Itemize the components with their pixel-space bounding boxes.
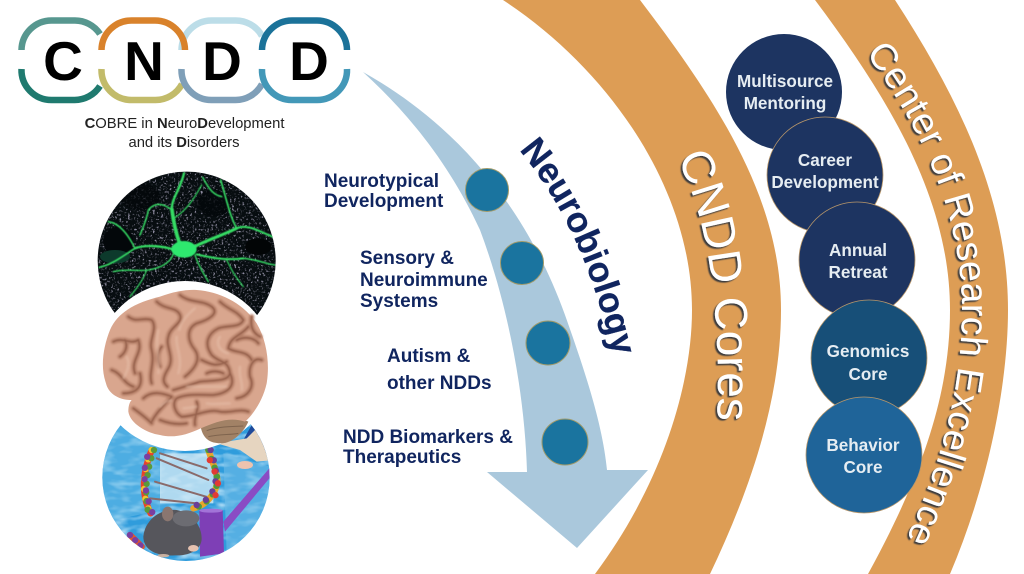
bubble: Annual Retreat: Retreat (829, 263, 888, 282)
node: Autism (526, 321, 570, 365)
brain halo (95, 281, 275, 451)
outer arc: Center of Research Excellence (815, 0, 1008, 574)
logo letters: N (124, 30, 164, 92)
bubble: Behavior Core (806, 397, 922, 513)
icon: purple bars (199, 468, 269, 557)
logo: CNDD (21, 20, 347, 151)
brain folds (112, 295, 262, 425)
icon: grey mouse (143, 507, 202, 557)
bubble: Annual Retreat: Annual (829, 241, 887, 260)
label: Neurotypical Development: Neurotypical (324, 171, 439, 192)
arc label: CNDD Cores: CNDD Cores (680, 152, 748, 422)
bubble: Behavior Core: Behavior (826, 436, 900, 455)
label: NDD Biomarkers and Therapeutics: Therapeutics (343, 447, 461, 468)
bubble: Career Development: Development (771, 173, 879, 192)
logo letters (43, 30, 329, 92)
node: Neurotypical Development (466, 168, 508, 212)
label: Neurotypical Development: Development (324, 191, 444, 212)
logo letters: C (43, 30, 83, 92)
bubble: Genomics Core (811, 300, 927, 416)
photo: DNA and mouse (102, 424, 270, 561)
arc label: Center of Research Excellence: Center of Research Excellence (868, 44, 988, 546)
logo ring D lower (181, 69, 262, 100)
node: Biomarkers (542, 419, 588, 465)
bubble: Genomics Core: Core (849, 365, 887, 384)
label: Sensory and Neuroimmune Systems: Systems (360, 291, 438, 312)
bubble: Multisource Mentoring: Mentoring (744, 94, 826, 113)
heading: Neurobiology: Neurobiology (520, 136, 632, 352)
photo: neuron (98, 172, 276, 315)
bubble: Multisource Mentoring (726, 34, 842, 150)
bubble: Annual Retreat (799, 202, 915, 318)
bubble: Multisource Mentoring: Multisource (737, 72, 833, 91)
logo caption: and its Disorders (128, 135, 240, 151)
bubble: Career Development (767, 117, 883, 233)
logo caption (85, 116, 284, 151)
bubble: Career Development: Career (798, 151, 852, 170)
bubble: Genomics Core: Genomics (827, 342, 909, 361)
arrow: neurobiology timeline (363, 72, 648, 548)
photo: brain (103, 290, 268, 443)
logo ring D (182, 20, 262, 50)
icon: DNA strands (130, 450, 218, 547)
logo ring D second (262, 20, 347, 100)
node: Sensory and Neuroimmune (500, 242, 544, 284)
logo letters: D (289, 30, 329, 92)
label: Autism and other NDDs: Autism & (387, 346, 471, 367)
logo ring N (101, 20, 185, 100)
logo ring C (21, 20, 100, 100)
label: Sensory and Neuroimmune Systems: Sensory & (360, 248, 454, 269)
photo stack: neuron, brain, DNA and mouse (95, 170, 278, 563)
icon: upper mouse (220, 426, 268, 469)
logo letters: D (202, 30, 242, 92)
label: NDD Biomarkers and Therapeutics: NDD Biomarkers & (343, 427, 513, 448)
inner arc: CNDD Cores (503, 0, 781, 574)
logo caption: COBRE in NeuroDevelopment (85, 116, 284, 132)
bubble: Behavior Core: Core (844, 458, 882, 477)
label: Sensory and Neuroimmune Systems: Neuroimmune (360, 270, 488, 291)
label: Autism and other NDDs: other NDDs (387, 373, 492, 394)
